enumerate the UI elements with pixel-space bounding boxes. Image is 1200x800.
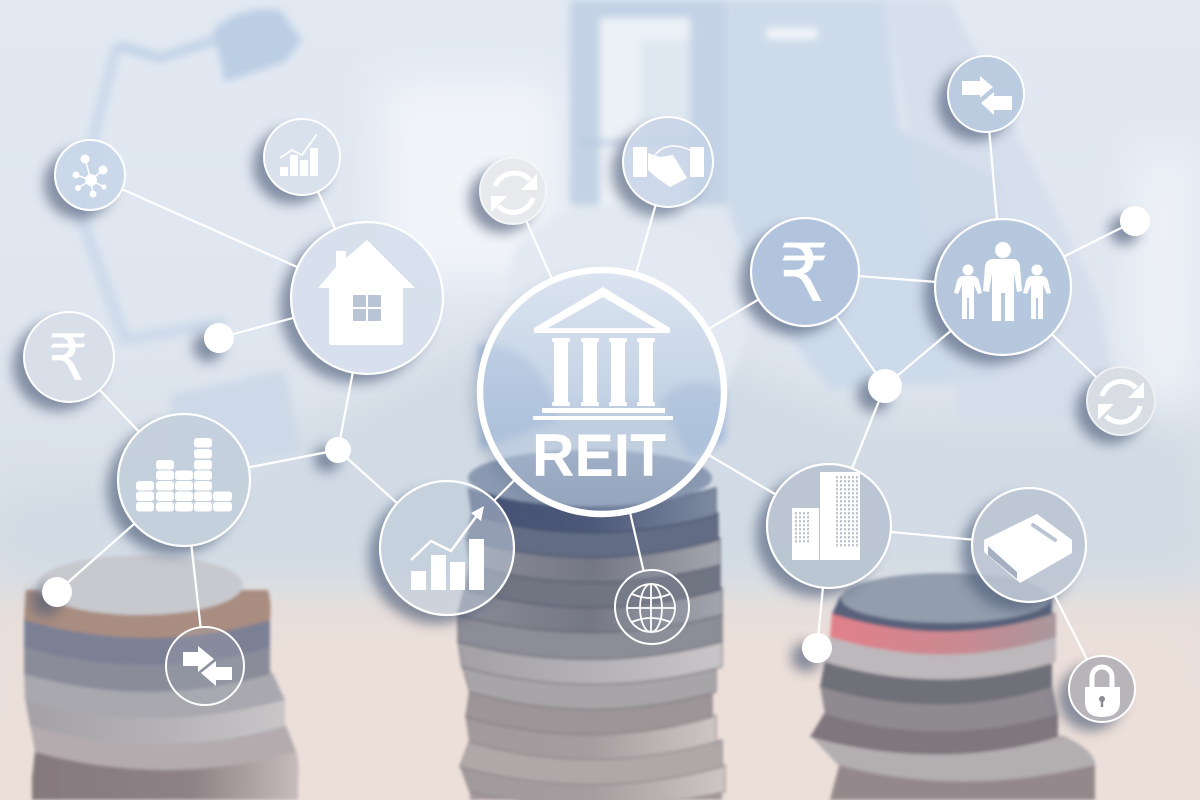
node: book <box>972 488 1086 602</box>
node: rupee left <box>24 312 114 402</box>
node: globe <box>615 570 689 644</box>
node: white dot top right <box>1120 206 1150 236</box>
blurred laptop <box>170 370 300 480</box>
node: white dot lower right <box>802 633 832 663</box>
node: house <box>291 222 443 374</box>
node: rupee right <box>751 218 859 326</box>
node: rupee right: ₹ <box>779 229 829 318</box>
node: lock <box>1069 656 1135 722</box>
node: refresh right <box>1087 367 1155 435</box>
blurred suit <box>725 0 1000 390</box>
node: network <box>55 140 125 210</box>
node: exchange arrows top <box>948 56 1024 132</box>
coin stack left <box>24 555 299 800</box>
node: rupee left: ₹ <box>48 322 88 394</box>
connector lines <box>68 132 1122 659</box>
coin stack right <box>810 573 1095 800</box>
icon: bank building <box>533 287 673 420</box>
node: handshake <box>623 117 713 207</box>
coin stack center <box>458 450 725 800</box>
node: white dot junction right <box>868 369 902 403</box>
node: white dot junction <box>325 437 351 463</box>
node: coin bars <box>118 414 250 546</box>
node: family <box>935 219 1071 355</box>
node: small bar chart <box>264 119 340 195</box>
node: white dot lower left <box>42 577 72 607</box>
node drop shadows <box>13 65 1144 731</box>
node: white dot <box>204 323 234 353</box>
blurred hand <box>480 206 750 400</box>
node: REIT hub <box>480 270 724 514</box>
node: growth chart <box>380 481 514 615</box>
blurred desk lamp <box>80 9 302 340</box>
blurred window <box>570 0 725 208</box>
node: exchange arrows left <box>166 627 244 705</box>
node: buildings <box>767 464 891 588</box>
hub label: REIT <box>532 422 666 489</box>
node: refresh top <box>480 158 546 224</box>
